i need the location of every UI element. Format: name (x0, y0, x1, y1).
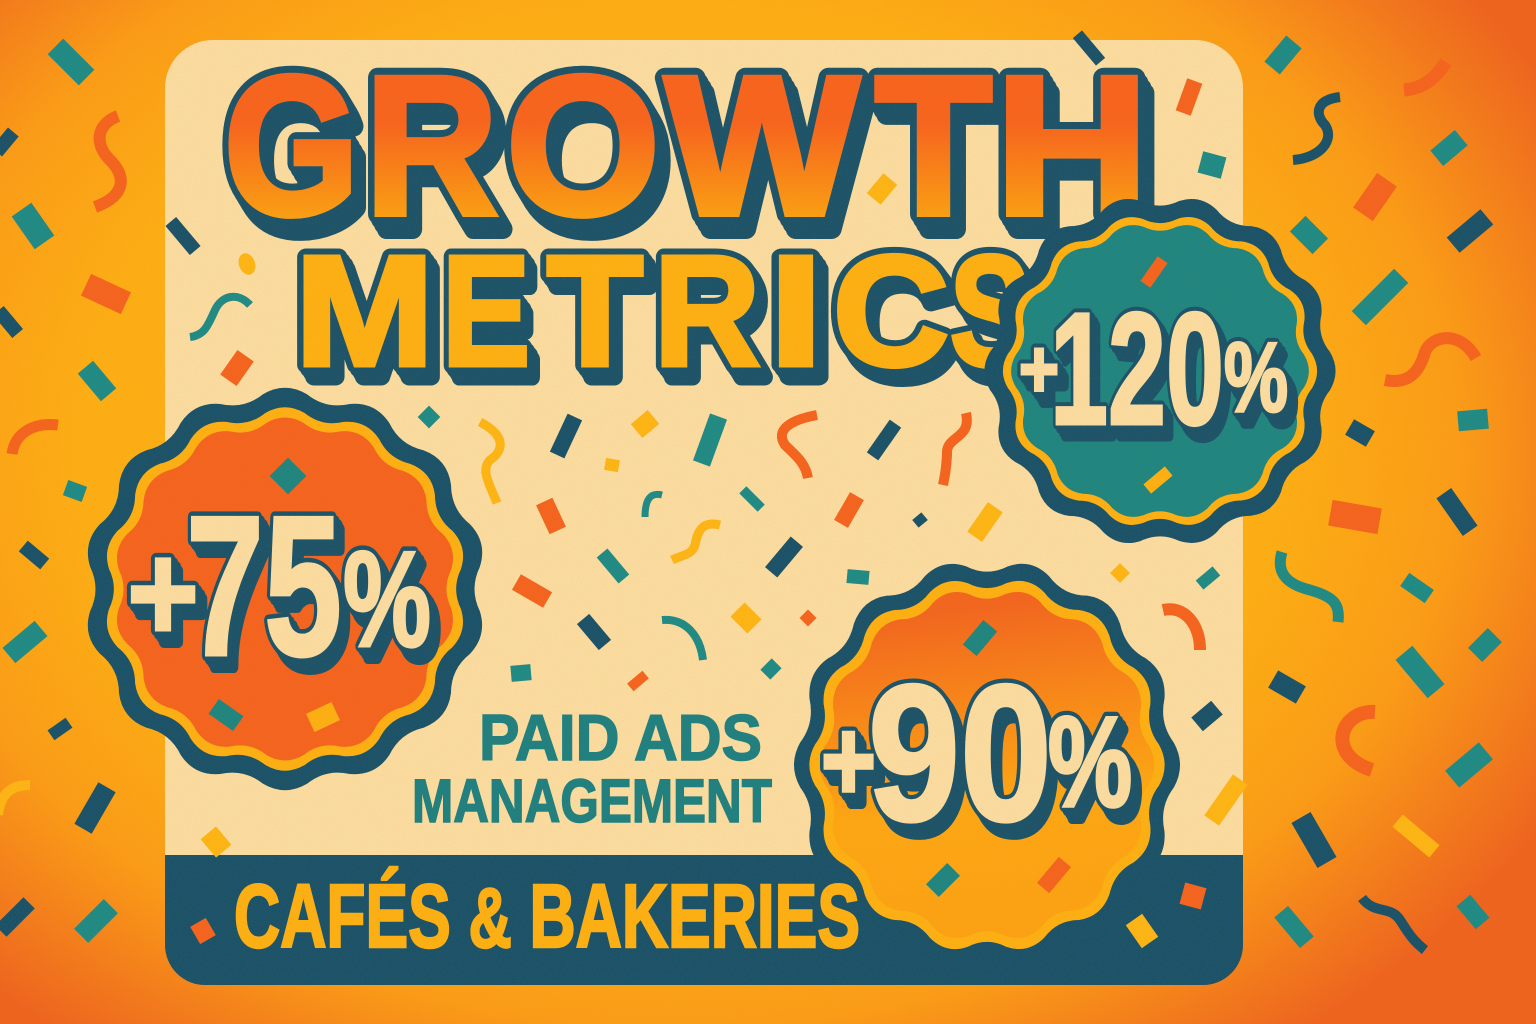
badge: +120%: % (1224, 322, 1288, 432)
badge: +75%: 75 (186, 475, 342, 698)
title: GROWTH: R (365, 35, 498, 256)
badge: +90%: % (1048, 691, 1132, 834)
badge: +120%: + (1019, 324, 1059, 415)
title: GROWTH: W (665, 35, 859, 256)
text: PAID ADS MANAGEMENT: PAID ADS (479, 701, 762, 774)
badge: +120%: % (1224, 322, 1288, 432)
title: GROWTH: H (995, 35, 1149, 256)
title: METRICS: C (833, 224, 949, 399)
banner: dark footer band (165, 855, 1243, 985)
title: METRICS: C (833, 224, 949, 399)
title: GROWTH: G (224, 35, 359, 256)
title: GROWTH: R (365, 35, 498, 256)
badge: +75% (64, 368, 506, 810)
badge: +75%: % (343, 523, 431, 675)
badge: +90% (775, 539, 1199, 991)
badge: +90%: + (821, 697, 876, 825)
title: METRICS: I (769, 224, 823, 399)
title: GROWTH: H (995, 35, 1149, 256)
badge: +75%: 75 (186, 475, 342, 698)
banner text: CAFÉS & BAKERIES: CAFÉS & BAKERIES (234, 866, 860, 967)
panel: cream card (165, 40, 1243, 985)
title: GROWTH: O (506, 35, 660, 256)
badge: +75%: + (127, 514, 199, 671)
title: GROWTH (224, 35, 1149, 256)
title: GROWTH: G (224, 35, 359, 256)
title: METRICS: R (654, 224, 760, 399)
text: PAID ADS MANAGEMENT: MANAGEMENT (412, 767, 772, 835)
title: METRICS: I (769, 224, 823, 399)
confetti: inside panel (165, 30, 1248, 948)
title: METRICS: S (950, 224, 1031, 399)
title: GROWTH: W (665, 35, 859, 256)
badge: +75%: + (127, 514, 199, 671)
title: METRICS: T (547, 224, 643, 399)
title: METRICS (295, 224, 1031, 399)
badge: +75%: % (343, 523, 431, 675)
badge: +120% (967, 178, 1353, 564)
badge: +120%: + (1019, 324, 1059, 415)
confetti: right margin (1264, 36, 1502, 950)
title: METRICS: E (442, 224, 530, 399)
title: METRICS: M (295, 224, 434, 399)
text: PAID ADS MANAGEMENT (412, 701, 772, 835)
badge: +120%: 120 (1050, 279, 1224, 458)
title: METRICS: S (950, 224, 1031, 399)
title: GROWTH: T (875, 35, 992, 256)
title: METRICS: R (654, 224, 760, 399)
confetti: left margin (0, 39, 131, 943)
badge: +90%: 90 (868, 645, 1052, 862)
badge: +90%: 90 (868, 645, 1052, 862)
title: METRICS: M (295, 224, 434, 399)
badge: +90%: + (821, 697, 876, 825)
title: GROWTH: T (875, 35, 992, 256)
title: GROWTH: O (506, 35, 660, 256)
badge: +120%: 120 (1050, 279, 1224, 458)
title: METRICS: E (442, 224, 530, 399)
title: METRICS: T (547, 224, 643, 399)
badge: +90%: % (1048, 691, 1132, 834)
